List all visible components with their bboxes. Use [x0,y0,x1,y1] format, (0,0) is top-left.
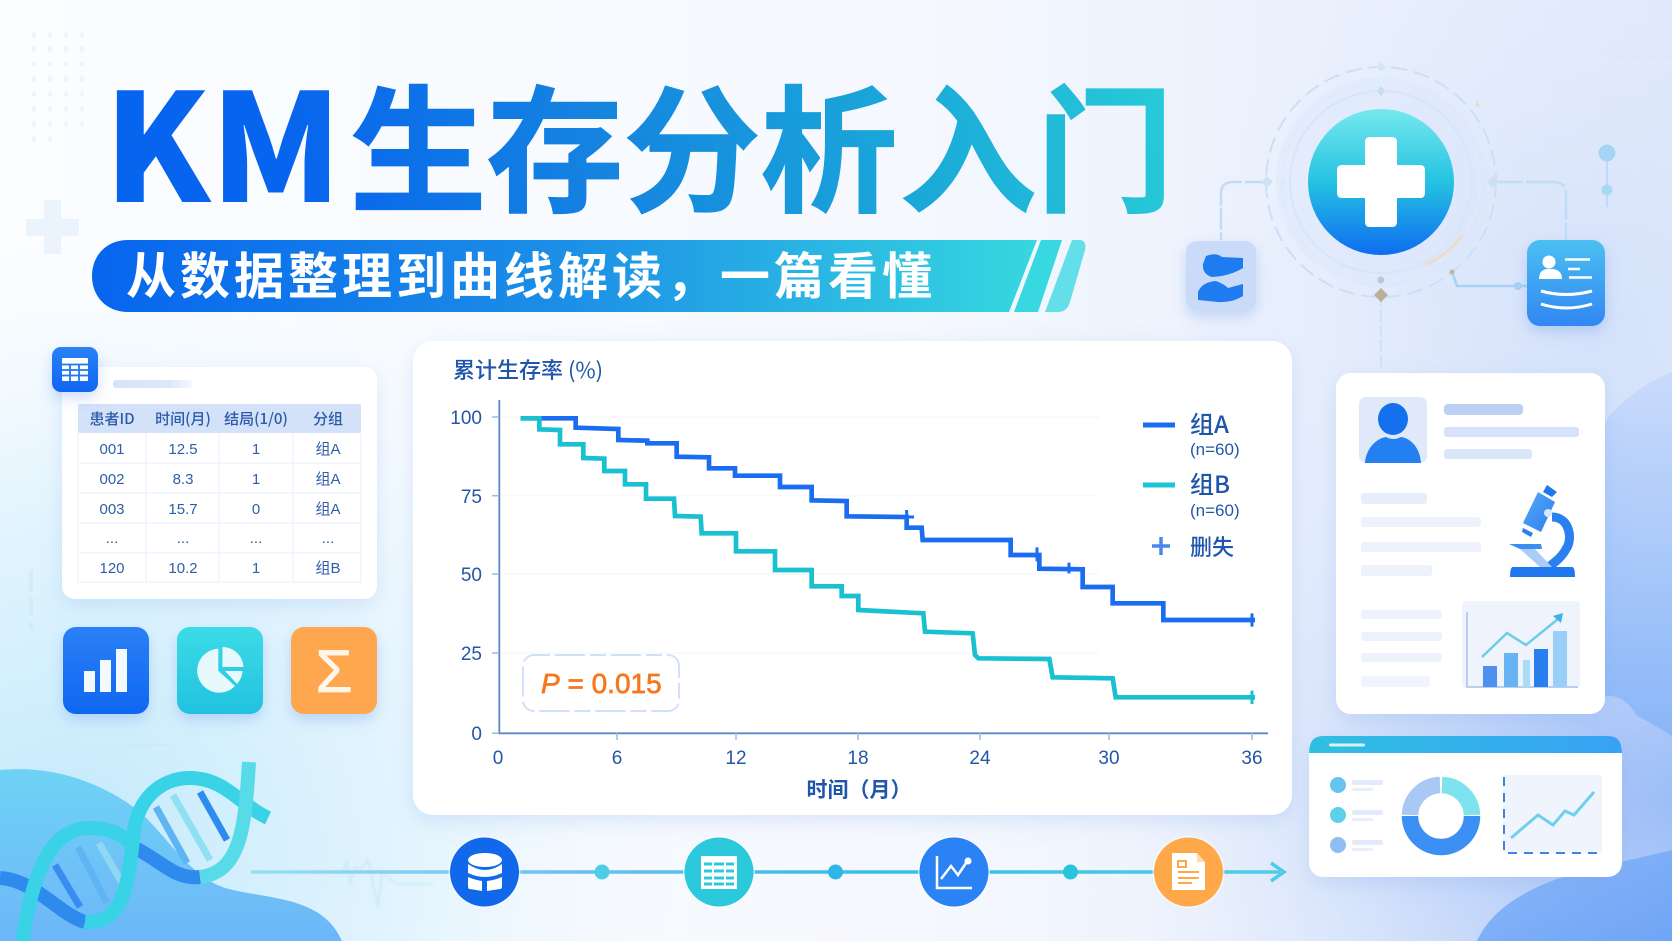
subtitle banner [92,237,1085,312]
table header: 患者ID [89,408,135,429]
icon: microscope [1509,485,1575,577]
legend list [1330,777,1383,853]
table body: 0 [252,501,260,518]
table header: 时间(月) [155,408,211,429]
y axis labels: 25 [461,644,482,665]
table body: 10.2 [168,560,198,577]
x axis labels: 24 [969,748,991,769]
table body: 1 [252,560,260,577]
icon: line chart [918,836,990,908]
icon: sigma tile [291,627,377,714]
x axis labels: 30 [1098,748,1120,769]
dashboard header [1309,736,1622,753]
text placeholders [1361,404,1579,687]
line chart [1503,775,1602,853]
decoration: dot grid [32,32,84,142]
table header: 分组 [313,408,343,429]
icon: pie chart tile [177,627,263,714]
y axis labels: 100 [450,408,482,429]
table body: 003 [99,501,125,518]
grid and axes [492,400,1268,740]
table body: ... [106,530,118,547]
table body: 15.7 [168,501,198,518]
y axis labels: 0 [471,724,482,745]
table body: ... [177,530,189,547]
table body: 组A [315,471,341,488]
avatar [1359,397,1427,463]
panel: dashboard [1309,736,1622,877]
y axis labels: 50 [461,565,482,586]
banner stripes [1014,240,1085,312]
flow dots [594,864,1078,880]
x axis labels: 36 [1241,748,1263,769]
mini chart [1462,601,1580,688]
icon: table badge [52,347,98,392]
y axis labels: 75 [461,487,482,508]
p value callout [523,655,679,711]
helix rungs [55,792,227,907]
arrow head [1271,863,1284,881]
table header: 结局(1/0) [224,408,288,429]
legend: (n=60) [1190,440,1240,459]
x axis labels: 18 [847,748,869,769]
icon: database [448,836,520,908]
x axis title: 时间（月） [806,779,912,802]
subtitle text: 从数据整理到曲线解读，一篇看懂 [126,237,936,309]
icon: bar chart tile [63,627,149,714]
y axis labels [450,408,482,745]
x axis labels: 12 [725,748,747,769]
panel: patient report [1336,373,1605,714]
x axis labels: 6 [612,748,622,769]
chart title: 累计生存率 (%) [453,353,603,385]
table body: 12.5 [168,441,198,458]
p value callout: P = 0.015 [541,668,662,699]
curve: group A [521,418,1255,627]
legend: 组B [1190,465,1230,500]
table body: 1 [252,441,260,458]
x axis labels: 0 [493,748,503,769]
x axis labels [493,748,1263,769]
decoration: faint ticks left [31,570,170,745]
legend: (n=60) [1190,501,1240,520]
illustration: DNA helix [0,762,268,941]
decoration: right background blob [1598,372,1672,736]
table body: 组B [315,560,341,577]
legend [1143,405,1240,562]
icon: sigma tile: Σ [315,638,353,705]
network nodes [1261,62,1616,302]
decoration: bottom left blob [0,769,342,941]
table body: 组A [315,441,341,458]
flow line [251,870,1280,874]
table body [78,433,361,582]
table body: ... [250,530,262,547]
icon: caring hands tile [1186,241,1256,311]
donut chart [1410,785,1472,847]
legend: 组A [1190,405,1229,440]
heartbeat trace [337,860,433,908]
workflow timeline [251,836,1284,908]
title: KM [104,29,342,246]
table body: ... [322,530,334,547]
table body: 002 [99,471,125,488]
panel: data table [62,367,377,599]
icon: medical cross circle [1308,109,1454,255]
decoration: bottom right blob [1477,850,1672,941]
decoration: faint plus [26,200,79,254]
legend: 删失 [1190,530,1234,562]
table body: 120 [99,560,125,577]
curve: group B [521,418,1255,704]
medical network rings [1221,62,1672,370]
table body: 8.3 [173,471,193,488]
table body: 组A [315,501,341,518]
title: 生存分析入门 [350,43,1174,241]
table body: 001 [99,441,125,458]
table body: 1 [252,471,260,488]
table header [78,404,361,433]
icon: patient record tile [1527,240,1605,326]
panel: KM chart [413,341,1292,815]
icon: table [683,836,755,908]
icon: document [1152,836,1224,908]
helix strands [0,762,268,941]
